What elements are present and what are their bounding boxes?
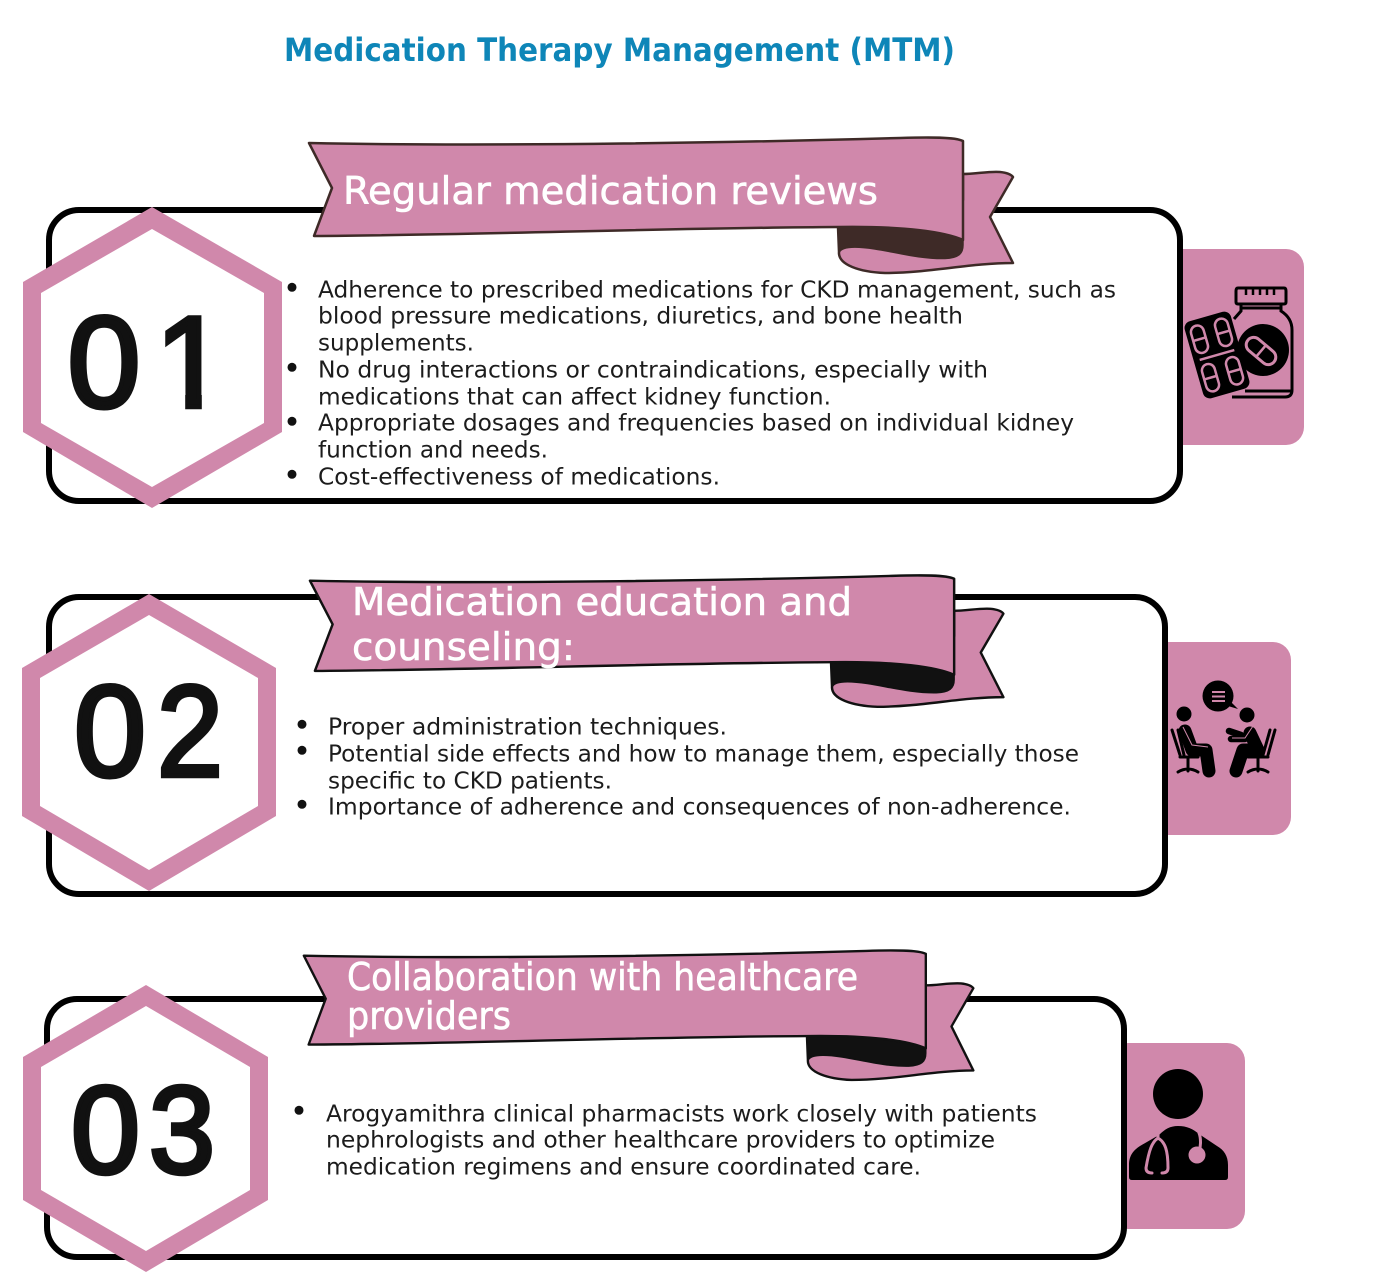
- bullet list 3: [294, 1099, 1037, 1180]
- panel: medication education and counseling: [22, 575, 1291, 894]
- bullet list 1: medications that can affect kidney function.: [318, 382, 831, 410]
- bullet list 1: Cost-effectiveness of medications.: [318, 462, 720, 490]
- card outline: [47, 999, 1124, 1257]
- bullet list 3: medication regimens and ensure coordinated care.: [326, 1152, 921, 1180]
- icon tab: medication: [1160, 249, 1304, 445]
- icon: doctor with stethoscope: [1129, 1069, 1228, 1180]
- ribbon heading 1: Regular medication reviews: [343, 169, 878, 213]
- bullet list 1: [288, 275, 1116, 490]
- bullet list 2: Proper administration techniques.: [328, 712, 727, 740]
- ribbon heading 2: Medication education and: [352, 580, 852, 624]
- bullet list 1: No drug interactions or contraindications, especially with: [318, 355, 988, 383]
- bullet list 2: specific to CKD patients.: [328, 766, 612, 794]
- bullet list 1: function and needs.: [318, 435, 548, 463]
- number hexagon 02: [22, 594, 276, 891]
- bullet list 1: Appropriate dosages and frequencies based on individual kidney: [318, 408, 1074, 436]
- bullet list 2: [298, 712, 1079, 820]
- card outline: [49, 210, 1180, 501]
- icon: pill bottle and blister pack: [1183, 288, 1292, 400]
- bullet list 2: Potential side effects and how to manage them, especially those: [328, 739, 1079, 767]
- ribbon heading 2: counseling:: [352, 625, 575, 669]
- number hexagon 01: [23, 207, 282, 508]
- number hexagon 02: 0: [74, 658, 146, 804]
- bullet list 3: nephrologists and other healthcare providers to optimize: [326, 1125, 995, 1153]
- number hexagon 03: 0: [71, 1062, 140, 1200]
- bullet list 1: Adherence to prescribed medications for CKD management, such as: [318, 275, 1116, 303]
- ribbon heading 2: [310, 575, 1003, 707]
- ribbon heading 3: Collaboration with healthcare: [347, 955, 858, 999]
- number hexagon 01: 0: [68, 289, 140, 435]
- ribbon heading 3: providers: [347, 994, 511, 1038]
- number hexagon 01: 1: [155, 289, 227, 435]
- icon tab: doctor: [1110, 1043, 1245, 1229]
- bullet list 1: supplements.: [318, 328, 474, 356]
- number hexagon 03: [23, 985, 268, 1272]
- ribbon heading 1: [309, 137, 1013, 273]
- number hexagon 03: 3: [149, 1062, 215, 1200]
- bullet list 2: Importance of adherence and consequences of non-adherence.: [328, 792, 1071, 820]
- number hexagon 02: 2: [157, 658, 223, 804]
- title: Medication Therapy Management (MTM): [284, 31, 955, 69]
- ribbon heading 3: [304, 950, 973, 1080]
- card outline: [49, 597, 1165, 894]
- icon tab: counseling: [1150, 642, 1291, 835]
- bullet list 1: blood pressure medications, diuretics, and bone health: [318, 301, 963, 329]
- icon: two people talking: [1172, 680, 1275, 772]
- panel: regular medication reviews: [23, 137, 1304, 508]
- bullet list 3: Arogyamithra clinical pharmacists work closely with patients: [326, 1099, 1037, 1127]
- panel: collaboration with healthcare providers: [23, 950, 1245, 1272]
